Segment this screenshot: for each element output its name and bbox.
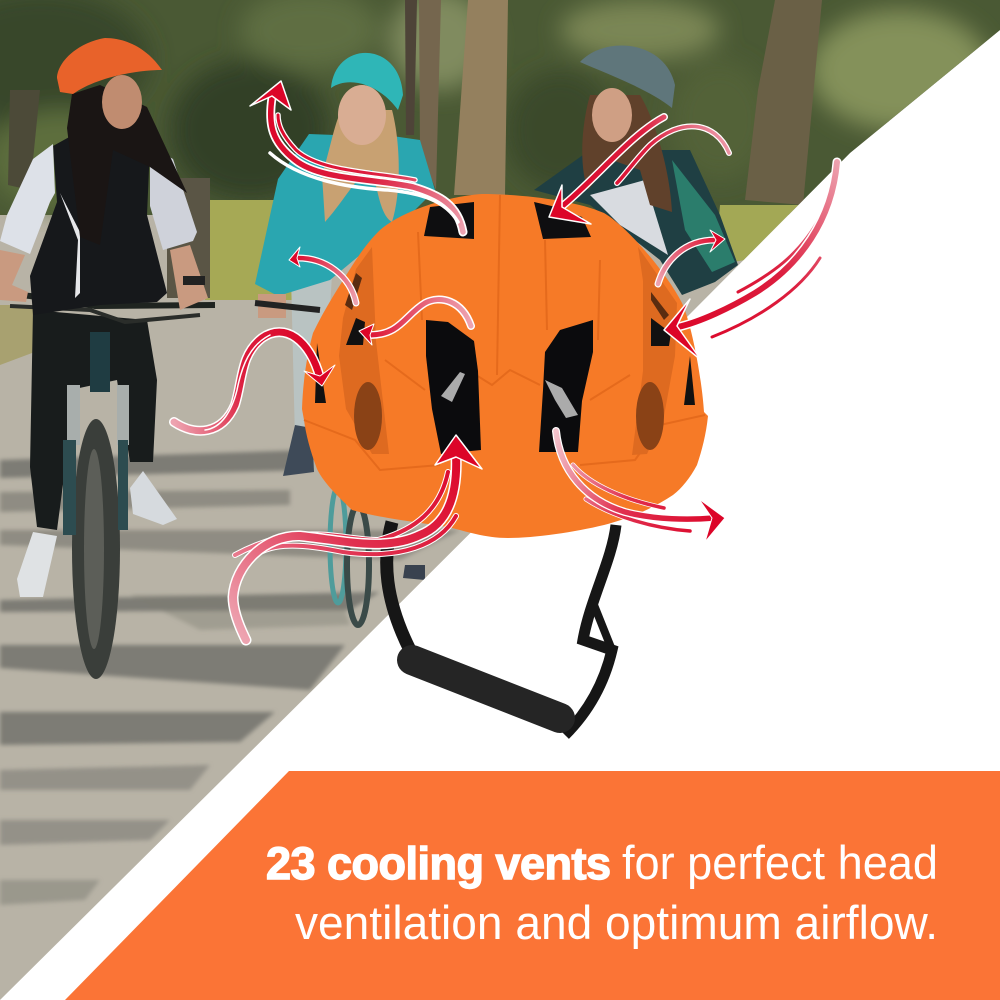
arrow: left middle — [174, 332, 335, 431]
top vents — [424, 202, 474, 239]
trees background — [0, 0, 1000, 215]
cyclist left — [0, 38, 215, 679]
strap — [387, 522, 616, 735]
cyclist middle — [255, 53, 435, 625]
caption banner — [65, 771, 1000, 1000]
hair — [67, 85, 187, 245]
arrow: left small — [289, 247, 356, 303]
grass — [0, 200, 800, 365]
helmet — [302, 194, 708, 538]
bicycle — [0, 293, 215, 679]
arrow: top-right vent inward — [549, 117, 729, 224]
bin post — [167, 178, 210, 298]
side honeycomb vents — [339, 247, 389, 454]
caption text: for perfect head — [622, 836, 938, 889]
caption text: ventilation and optimum airflow. — [295, 896, 938, 949]
arrow: bottom center — [233, 435, 482, 640]
airflow arrows — [174, 81, 837, 640]
helmet ribs — [304, 195, 705, 470]
helmet — [57, 38, 162, 94]
arrow: top-left vent upward — [250, 81, 463, 232]
caption text — [266, 836, 938, 949]
torso — [30, 120, 167, 315]
arrow: right side large — [664, 162, 837, 360]
arrow: bottom right outflow — [556, 431, 725, 542]
arrow: upper right small — [658, 230, 725, 284]
road shadows — [0, 450, 460, 905]
front vents — [426, 320, 481, 454]
arrow: center-left small — [359, 300, 471, 345]
cyclist right — [534, 45, 738, 295]
caption text: 23 cooling vents — [266, 838, 611, 889]
